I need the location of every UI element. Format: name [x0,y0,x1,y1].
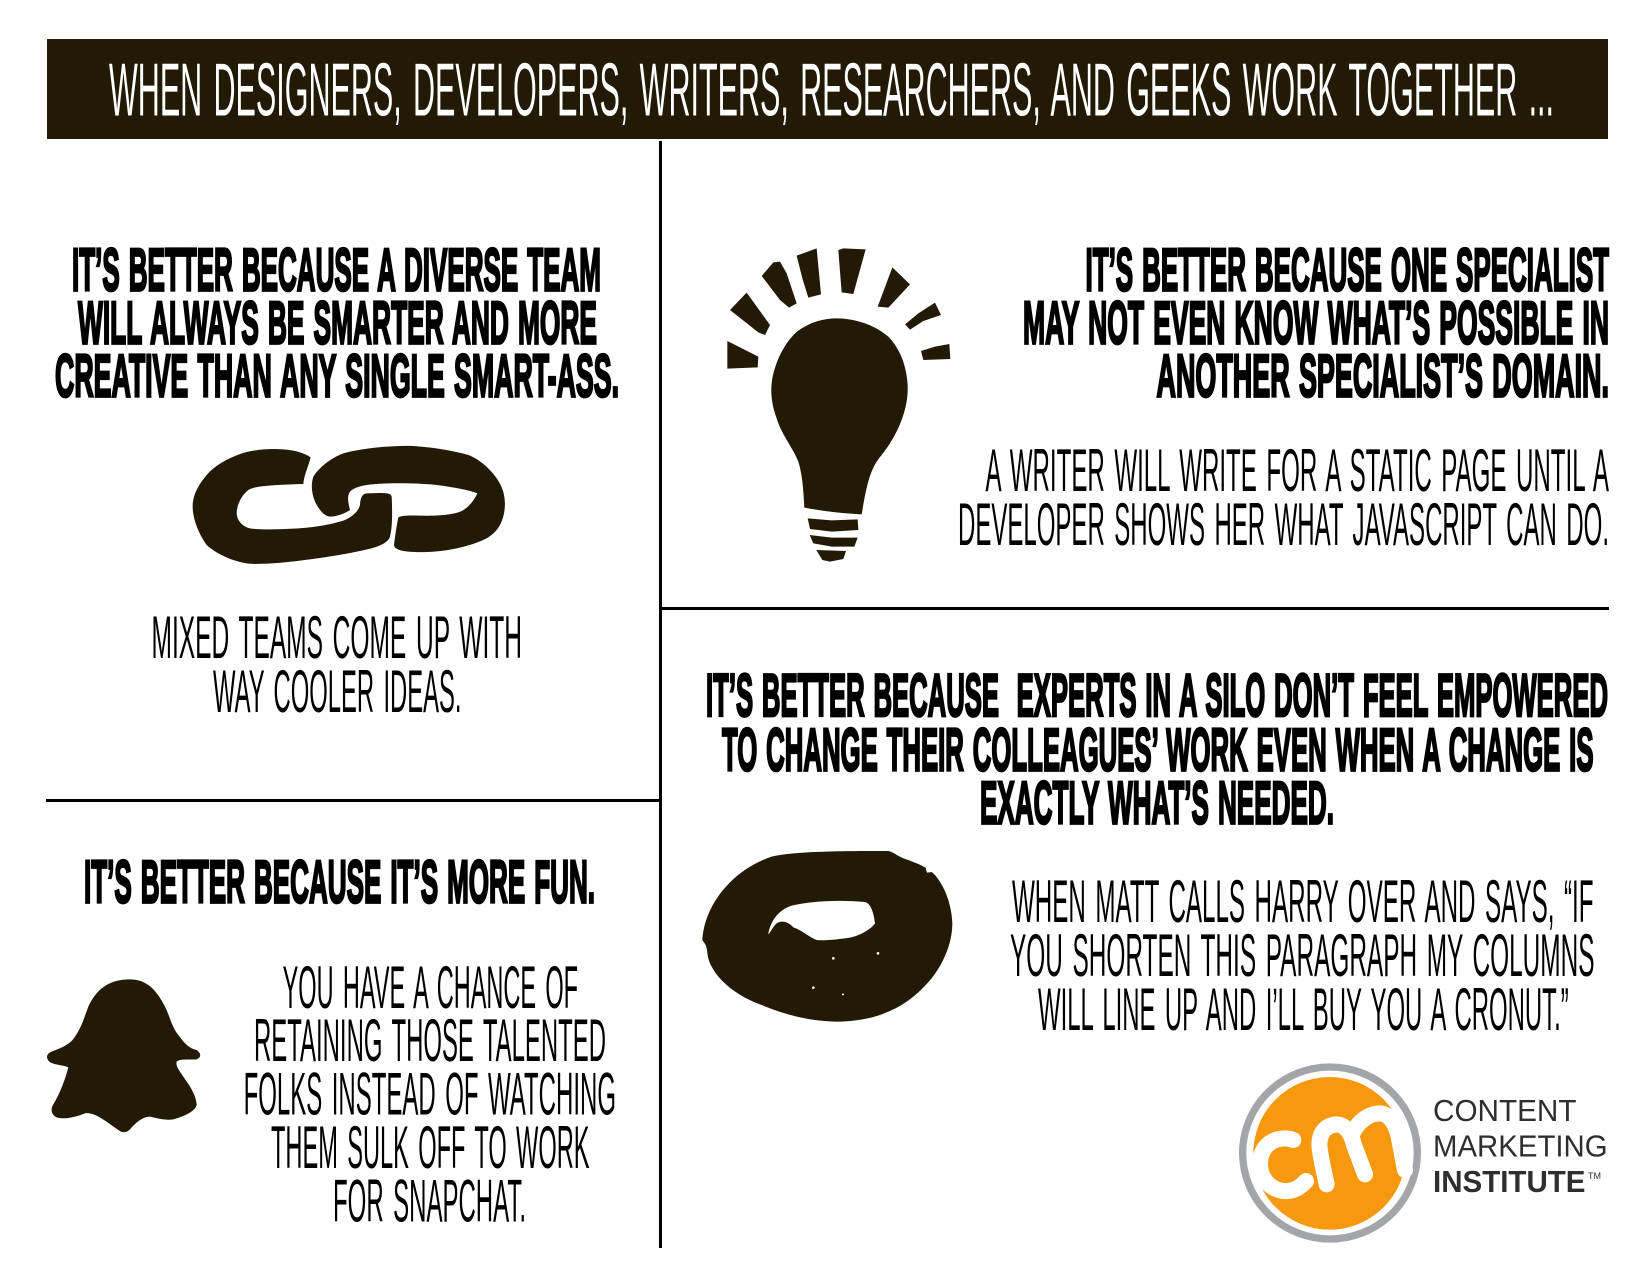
icon: snapchat ghost [47,979,200,1132]
body text: snapchat [244,954,616,1235]
body text: matt and harry [1010,868,1594,1043]
logo wordmark: INSTITUTE [1433,1165,1586,1199]
logo wordmark: MARKETING [1433,1129,1608,1163]
logo wordmark [1433,1094,1608,1199]
icon: light bulb [727,248,950,562]
panel: diverse team [55,237,619,725]
panel: diverse team: MIXED TEAMS COME UP WITH [152,604,522,671]
text: IT’S BETTER BECAUSE IT’S MORE FUN. [84,848,595,916]
panel: more fun [47,848,616,1235]
text: FOLKS INSTEAD OF WATCHING [244,1061,616,1128]
text: CREATIVE THAN ANY SINGLE SMART-ASS. [55,343,619,410]
text: YOU HAVE A CHANCE OF [283,954,578,1021]
body text: snapchat: FOR SNAPCHAT. [333,1168,526,1235]
panel: specialist [727,237,1609,562]
panel: experts in a silo [702,662,1608,1043]
logo wordmark: TM [1588,1171,1601,1181]
text: WILL ALWAYS BE SMARTER AND MORE [78,290,597,357]
text: THEM SULK OFF TO WORK [271,1114,590,1181]
icon: cm badge [1243,1067,1417,1239]
body text: mixed teams [152,604,522,725]
text: RETAINING THOSE TALENTED [254,1007,606,1074]
logo wordmark: CONTENT [1433,1094,1576,1128]
heading: experts in a silo [706,662,1608,836]
icon: chain link [193,446,505,564]
heading: diverse team [55,237,619,410]
text: IT’S BETTER BECAUSE A DIVERSE TEAM [72,237,601,304]
logo: content marketing institute [1243,1067,1608,1239]
panel: diverse team: WAY COOLER IDEAS. [213,658,462,725]
body text: writer and developer [958,437,1609,558]
icon: cronut [702,851,952,1022]
heading: specialist [1023,237,1609,410]
